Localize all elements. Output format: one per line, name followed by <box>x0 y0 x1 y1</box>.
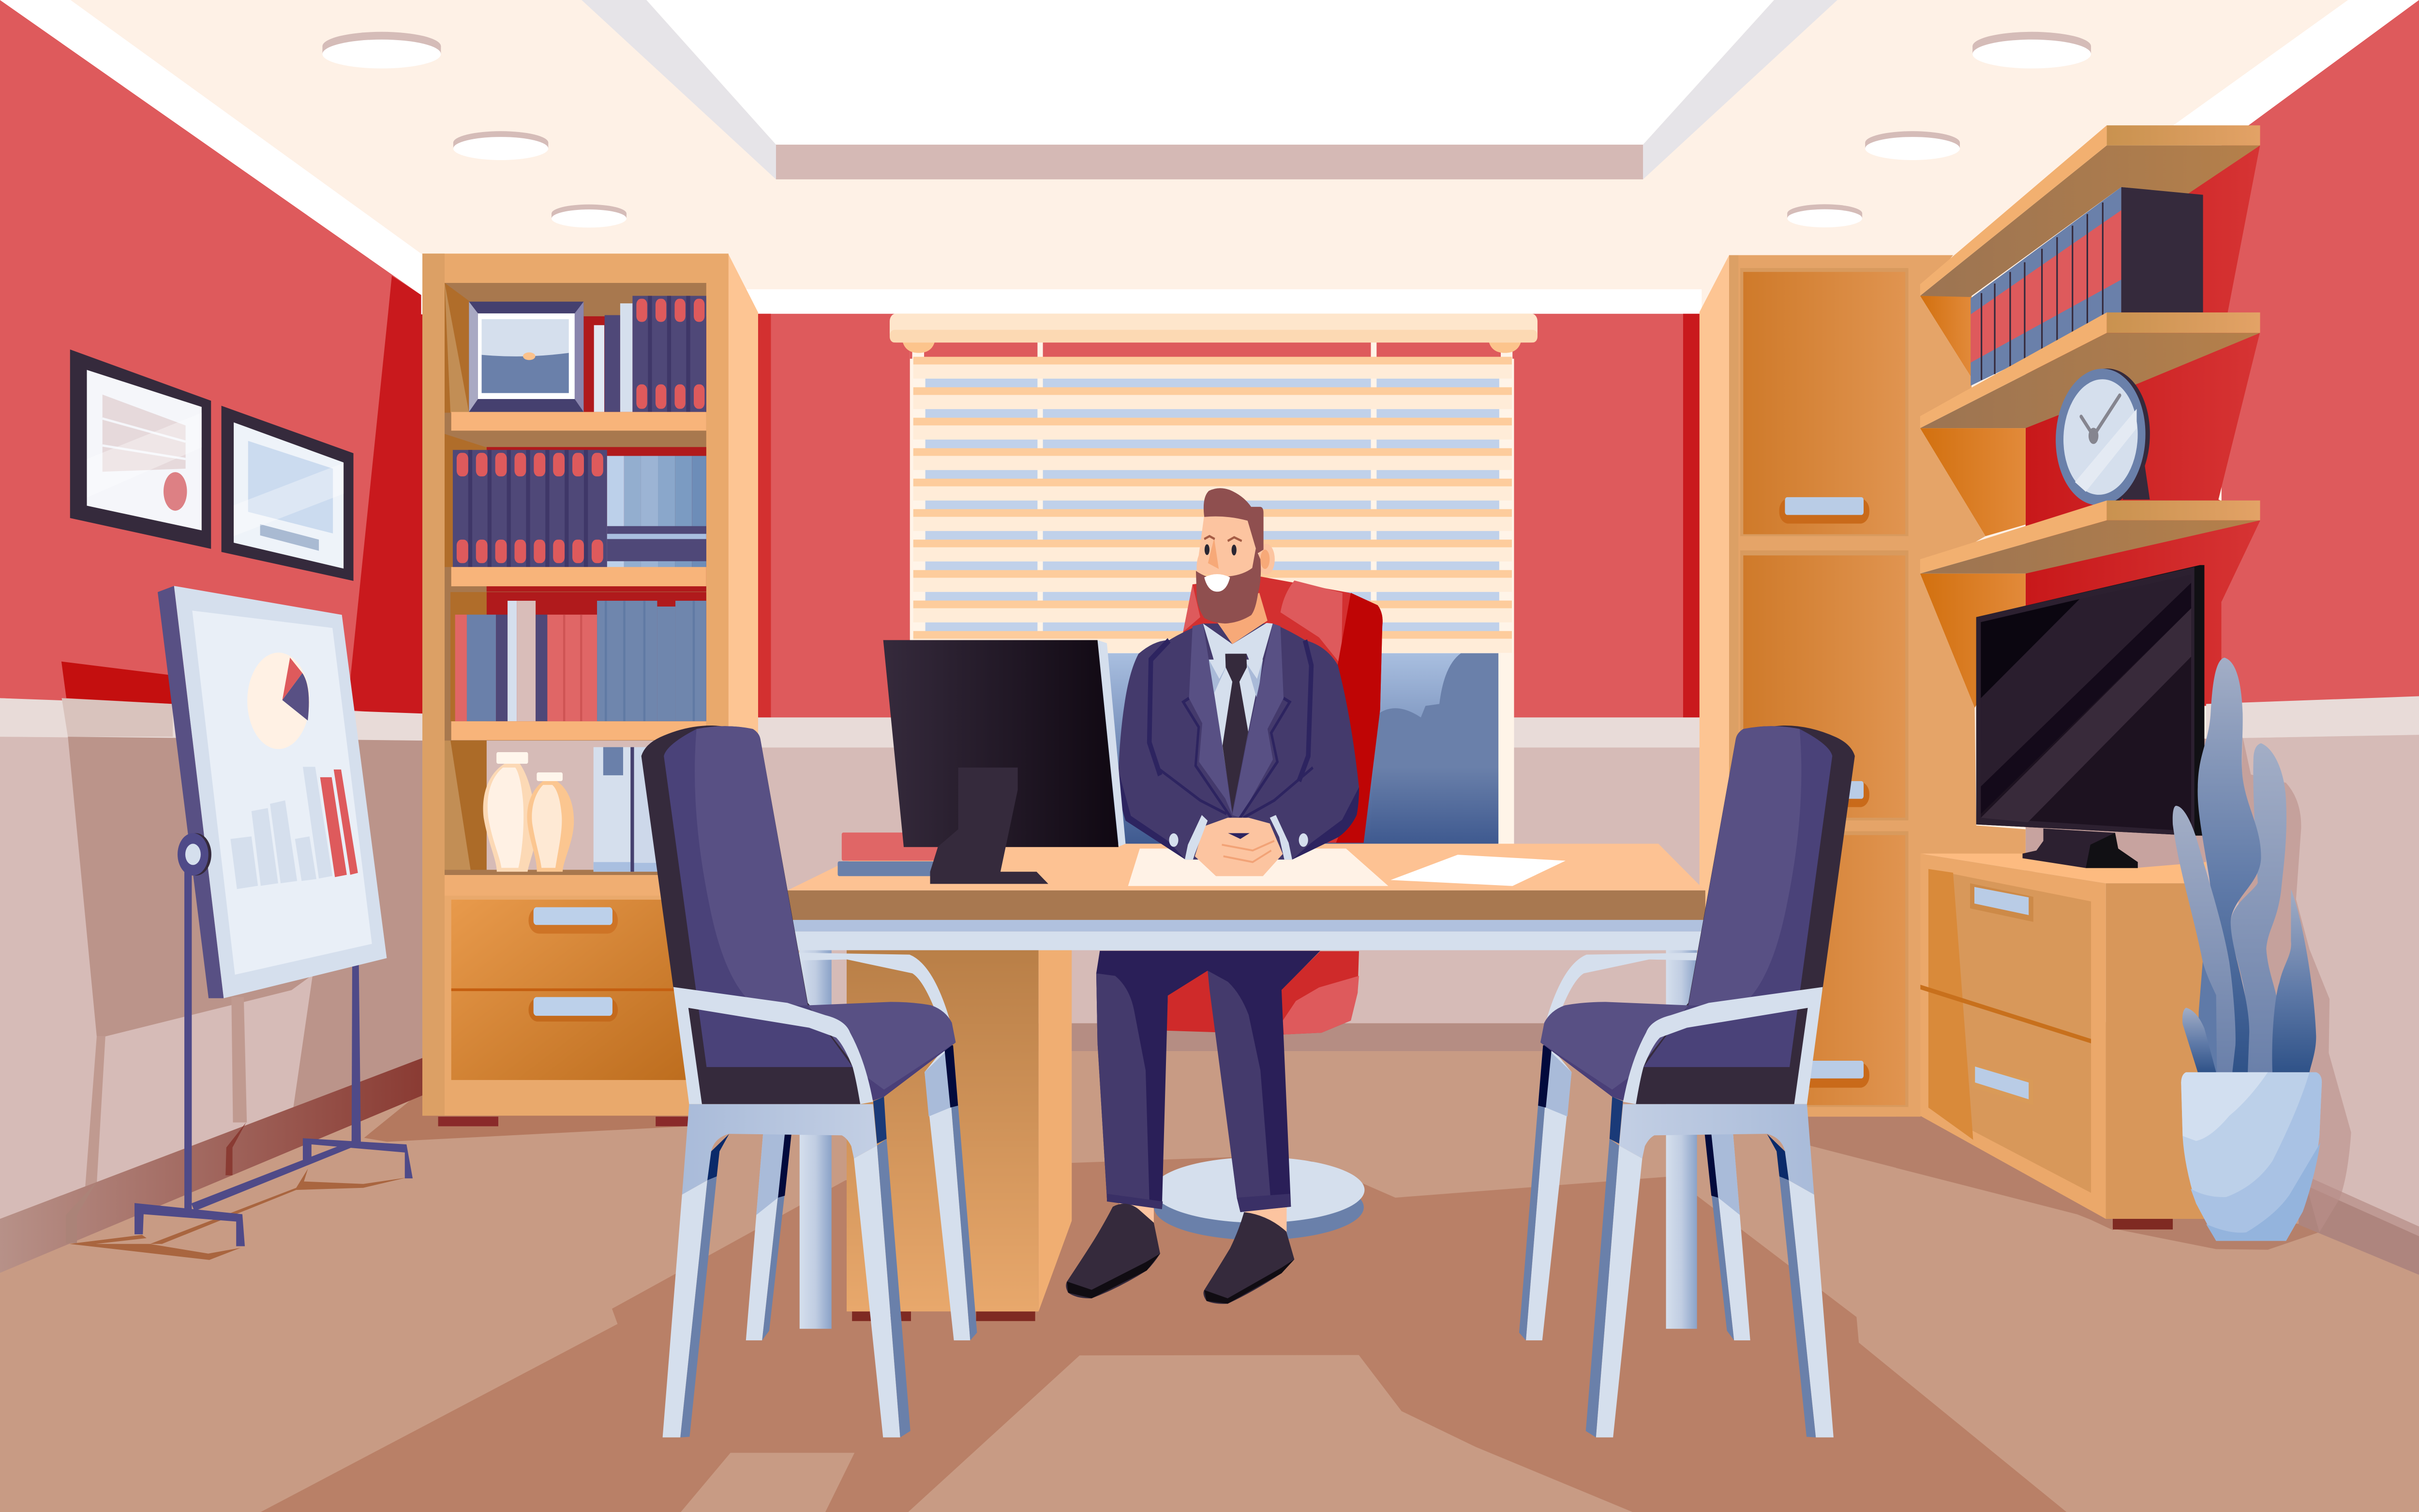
right cabinet <box>1700 255 2026 1117</box>
TV <box>1976 565 2204 868</box>
bar chart <box>230 767 358 889</box>
chair backrest <box>1183 576 1383 843</box>
ceiling lamps <box>322 32 2091 227</box>
back wall <box>421 289 1702 1051</box>
certificates <box>70 349 354 581</box>
jacket buttons <box>1169 833 1308 847</box>
cabinet handles <box>1970 883 2033 1105</box>
books top shelf <box>594 296 706 412</box>
door panels <box>1740 268 1909 1107</box>
collar and shirt <box>1203 623 1273 810</box>
desk papers <box>1128 848 1566 886</box>
orange shelf supports <box>1920 296 2026 708</box>
certificate one <box>70 349 211 549</box>
front legs <box>663 1097 911 1438</box>
plant <box>2173 658 2316 1072</box>
hair <box>1204 488 1264 553</box>
chair base disc <box>1153 1157 1364 1240</box>
books second shelf <box>453 450 706 567</box>
drawers <box>451 900 688 1080</box>
middle shelf <box>1920 312 2260 428</box>
picture frame on shelf <box>469 302 583 412</box>
clock <box>2050 363 2155 511</box>
clouds through window <box>1370 653 1498 843</box>
top shelf <box>1920 125 2260 297</box>
plant pot <box>2181 1072 2322 1241</box>
vases <box>483 752 574 872</box>
window with blinds <box>890 313 1538 844</box>
desk <box>788 844 1705 1329</box>
seat rail <box>682 1104 877 1195</box>
flipchart <box>134 586 413 1246</box>
left bookcase <box>422 253 758 1127</box>
computer monitor <box>883 640 1126 884</box>
desk pedestal <box>847 950 1072 1321</box>
ceiling <box>0 0 2419 328</box>
pie chart <box>247 652 310 749</box>
right visitor chair <box>1519 726 1855 1438</box>
man upper body <box>1118 488 1359 876</box>
chair back <box>642 726 884 1104</box>
lapels <box>1183 623 1290 820</box>
books on desk <box>838 832 938 876</box>
lower shelf <box>1920 501 2260 574</box>
rear legs <box>746 1045 977 1340</box>
front arm <box>673 987 873 1104</box>
blind valance <box>890 313 1538 353</box>
desk legs <box>800 950 1697 1329</box>
shirt cuffs <box>1185 815 1292 860</box>
floor <box>0 1022 2419 1512</box>
chair seat <box>1166 951 1359 1035</box>
man shoes <box>1066 1204 1294 1304</box>
manager chair <box>1153 576 1383 1240</box>
left wall <box>0 0 422 1273</box>
skin neck <box>1211 593 1268 644</box>
beard <box>1196 548 1261 623</box>
books third shelf <box>455 601 706 721</box>
jacket <box>1118 623 1359 860</box>
man legs <box>1096 951 1320 1234</box>
shelf books <box>1971 187 2203 385</box>
TV cabinet <box>1920 854 2206 1230</box>
certificate two <box>222 406 354 581</box>
hands <box>1195 818 1283 876</box>
eyes and brows <box>1204 536 1242 555</box>
plant shadow <box>2237 737 2351 1232</box>
tie <box>1223 654 1248 812</box>
right wall <box>2026 0 2419 1275</box>
head <box>1196 488 1275 623</box>
wall shelves <box>1920 125 2260 574</box>
chair seat <box>808 1002 956 1101</box>
left visitor chair <box>642 726 977 1438</box>
door handles <box>1779 497 1869 1088</box>
binders <box>594 747 665 872</box>
rear arm <box>798 953 950 1020</box>
